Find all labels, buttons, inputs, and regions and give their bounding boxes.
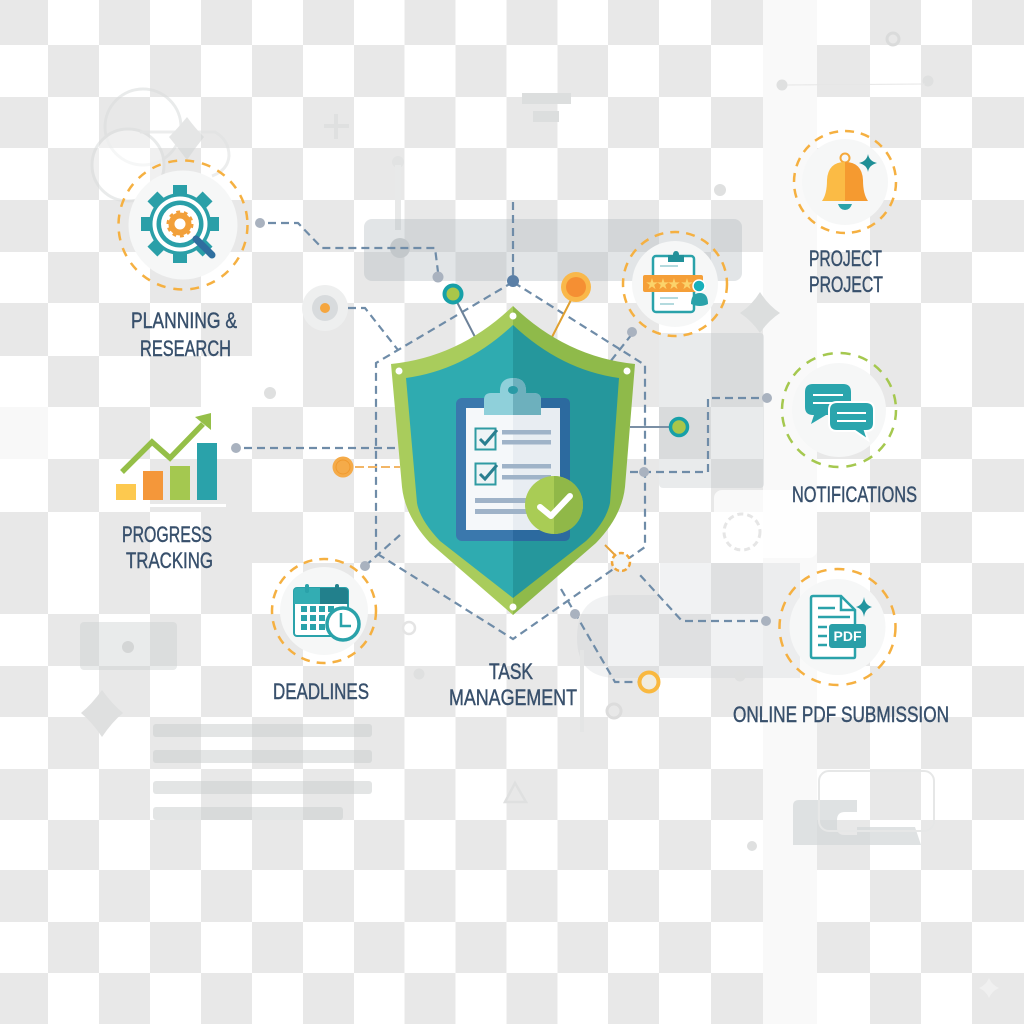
panel: project (794, 131, 896, 297)
background: speech bubble ghost (793, 771, 934, 845)
label: PROJECT (809, 246, 882, 271)
panel: progress tracking (100, 413, 226, 573)
label: DEADLINES (273, 679, 369, 704)
icon: bar chart with arrow (100, 413, 226, 507)
icon: pdf document (780, 569, 896, 685)
icon: rating clipboard (623, 232, 727, 336)
background: decorative dots and rings (264, 33, 999, 998)
background: faint stem (580, 650, 584, 732)
background: white panel with dashed circle (714, 490, 817, 558)
icon: rating clipboard: ★ (645, 275, 659, 293)
label: PROJECT (809, 272, 883, 297)
icon: rating clipboard: ★ (667, 275, 681, 293)
background: ghost cloud shapes (92, 89, 229, 201)
background: lower panel (577, 563, 800, 678)
yellow ring node (640, 672, 658, 692)
check badge (525, 476, 583, 534)
label: PROGRESS (122, 522, 212, 547)
background: faint pin (390, 156, 410, 258)
target node (302, 285, 348, 331)
label: RESEARCH (140, 336, 231, 361)
label: task management: MANAGEMENT (449, 685, 577, 710)
background: faint plus (324, 114, 349, 139)
background: right panel (659, 333, 764, 488)
icon: pdf document: PDF (834, 628, 862, 644)
label: NOTIFICATIONS (792, 482, 917, 507)
hexagon frame around shield (376, 282, 645, 639)
orange left node (332, 456, 400, 478)
background: text lines (153, 724, 372, 820)
panel: online pdf submission (733, 569, 949, 727)
background: top panel (364, 219, 742, 281)
panel: deadlines (272, 559, 376, 704)
checklist (475, 428, 551, 514)
orange pin (552, 272, 591, 337)
shield (391, 306, 635, 615)
background: faint bars (522, 93, 571, 122)
connector network (244, 202, 759, 682)
icon: rating clipboard: ★ (656, 275, 670, 293)
label: task management: TASK (489, 659, 533, 684)
label (809, 246, 883, 297)
panel: planning and research (118, 160, 248, 361)
label: TRACKING (126, 548, 213, 573)
right green pin (630, 418, 688, 436)
background: left card (80, 622, 177, 670)
label (131, 308, 237, 361)
label: task management (449, 659, 577, 710)
background: star shape right (740, 292, 780, 333)
label: ONLINE PDF SUBMISSION (733, 702, 949, 727)
connector nodes (231, 218, 772, 626)
icon: chat bubbles (782, 353, 896, 467)
background: star shape left (81, 690, 123, 737)
label: PLANNING & (131, 308, 237, 333)
dashed orange ring (605, 545, 630, 571)
green pin (444, 286, 475, 337)
icon: bell (794, 131, 896, 233)
icon: rating clipboard: ★ (680, 275, 694, 293)
clipboard (456, 378, 583, 541)
icon: gear with magnifier (118, 160, 248, 290)
label (122, 522, 213, 573)
panel: notifications (782, 353, 917, 507)
icon: calendar with clock (272, 559, 376, 663)
